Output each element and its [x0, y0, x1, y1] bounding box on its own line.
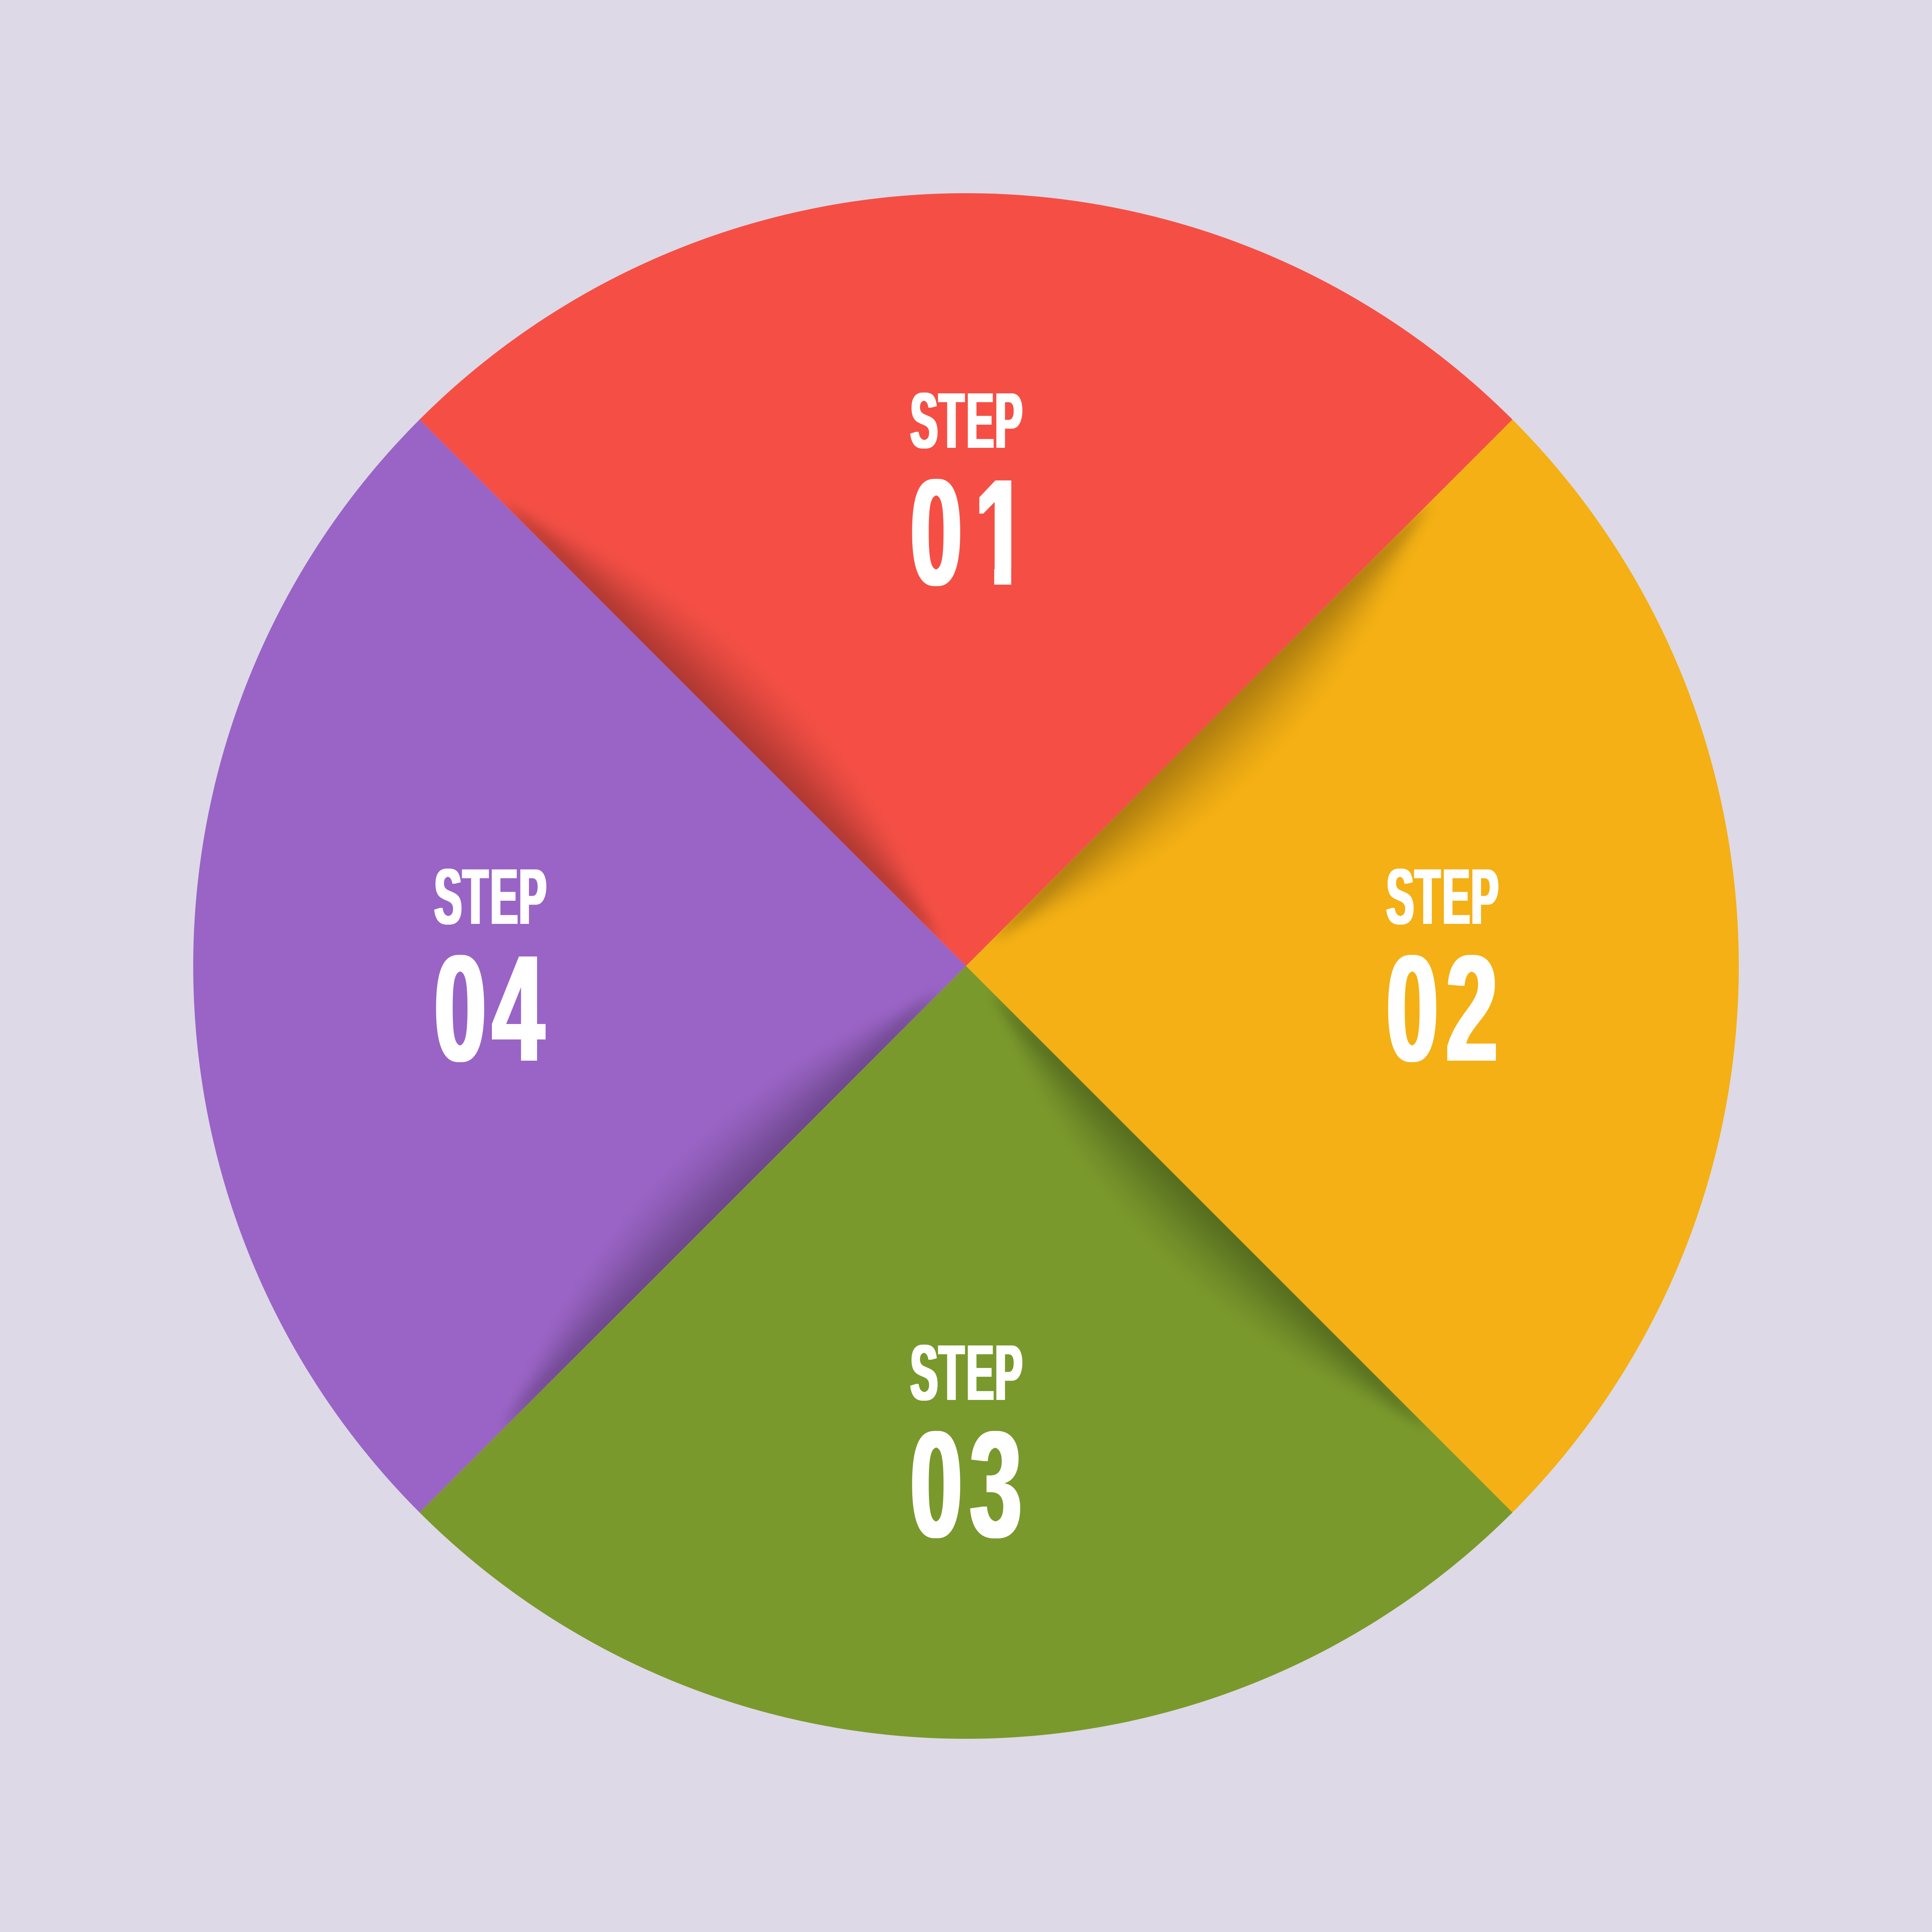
panel: step 04 purple sector: [193, 420, 966, 1512]
panel: step 02 yellow sector: [966, 420, 1739, 1512]
panel: step 03 green sector: [420, 966, 1512, 1739]
label: step 01: 01: [910, 448, 1027, 617]
label: step 04: 04: [434, 924, 545, 1093]
label: step 03: [910, 1328, 1022, 1569]
label: step 03: STEP: [910, 1328, 1022, 1417]
panel: step 01 red sector: [420, 193, 1512, 966]
label: step 03: 03: [910, 1400, 1022, 1569]
label: step 01: [910, 393, 1022, 586]
label: step 01: STEP: [910, 376, 1022, 465]
label: step 02: 02: [1386, 924, 1498, 1093]
label: step 02: [1386, 852, 1498, 1093]
label: step 04: STEP: [434, 852, 546, 941]
label: step 02: STEP: [1386, 852, 1498, 941]
label: step 04: [434, 852, 546, 1093]
infographic: four step pie: [193, 193, 1739, 1739]
